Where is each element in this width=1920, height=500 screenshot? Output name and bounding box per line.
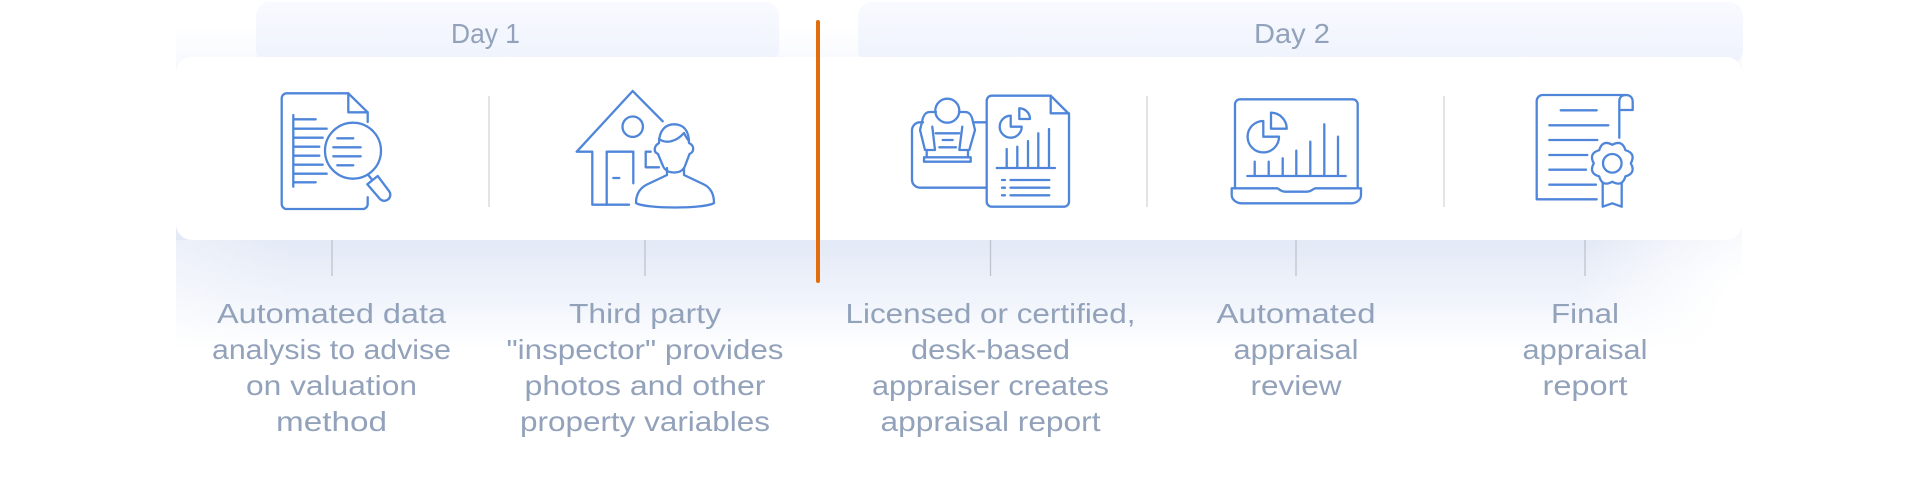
label: step 3	[846, 298, 1136, 437]
icon: document with magnifier	[282, 93, 390, 209]
label: step 3: appraiser creates	[872, 370, 1109, 401]
label: step 4: review	[1250, 370, 1342, 401]
label: step 1: method	[276, 406, 387, 437]
backdrop gradient	[176, 25, 1742, 350]
orange day separator	[816, 20, 820, 283]
icon: certificate with seal	[1537, 95, 1633, 207]
label: step 5: report	[1542, 370, 1628, 401]
white icon panel	[176, 57, 1742, 240]
label: step 2: "inspector" provides	[506, 334, 784, 365]
label: step 4	[1216, 298, 1376, 401]
tab: Day 1: Day 1	[451, 18, 520, 49]
label: step 4: Automated	[1216, 298, 1376, 329]
tab: Day 2	[858, 2, 1743, 64]
label: step 3: appraisal report	[880, 406, 1101, 437]
label: step 1: analysis to advise	[212, 334, 451, 365]
panel dividers	[489, 96, 1444, 207]
label: step 2	[506, 298, 784, 437]
label: step 1: on valuation	[246, 370, 417, 401]
label: step 5: appraisal	[1522, 334, 1648, 365]
icon: desk appraiser with report	[912, 96, 1069, 207]
label: step 1: Automated data	[217, 298, 446, 329]
label: step 2: Third party	[569, 298, 721, 329]
connector ticks	[332, 240, 1585, 276]
tab: Day 2: Day 2	[1254, 18, 1330, 49]
label: step 2: property variables	[520, 406, 770, 437]
label: step 3: desk-based	[911, 334, 1070, 365]
label: step 1	[212, 298, 451, 437]
label: step 2: photos and other	[524, 370, 766, 401]
label: step 3: Licensed or certified,	[846, 298, 1136, 329]
label: step 4: appraisal	[1234, 334, 1358, 365]
icon: laptop with charts	[1232, 99, 1361, 203]
tab: Day 1	[256, 2, 779, 64]
label: step 5: Final	[1551, 298, 1619, 329]
label: step 5	[1522, 298, 1648, 401]
icon: house with inspector	[577, 91, 714, 208]
